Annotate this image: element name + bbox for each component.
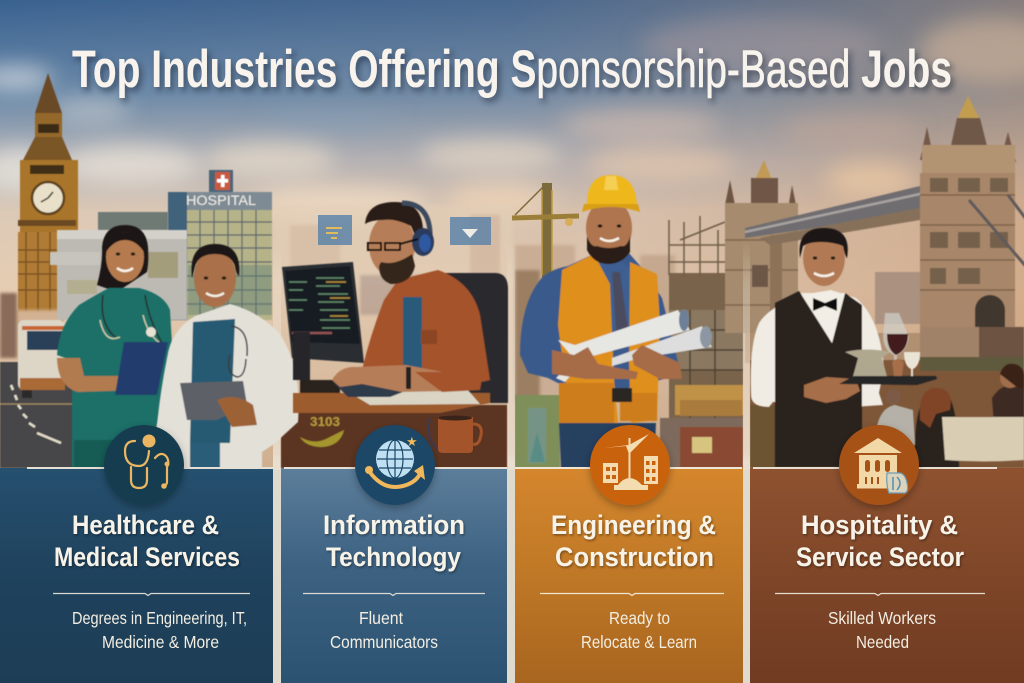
description: Ready to — [609, 608, 670, 628]
bridge base and ground — [745, 327, 1024, 468]
forearms and hands — [552, 347, 638, 379]
right bridge tower — [920, 96, 1016, 328]
IT desk area — [281, 405, 507, 468]
hospital building — [168, 170, 272, 320]
description — [330, 608, 438, 652]
icon: hotel building with mug — [839, 425, 919, 505]
clipboard — [115, 342, 168, 395]
description: Needed — [856, 632, 909, 652]
heading — [54, 510, 240, 572]
icon: globe with arrow: ★ — [406, 434, 418, 449]
landmark: Big Ben clock tower — [18, 73, 78, 322]
keyboard — [333, 382, 408, 397]
description: Skilled Workers — [828, 608, 936, 628]
ambulance — [18, 320, 65, 398]
heading: Healthcare & — [72, 510, 219, 540]
desk code label: 3103 — [310, 414, 340, 429]
street, road and ambulance — [0, 320, 160, 468]
panel: information technology — [281, 425, 507, 683]
bow tie — [813, 298, 837, 311]
floating UI card: download arrow — [450, 217, 491, 245]
heading: Engineering & — [551, 510, 716, 540]
person: doctor — [155, 244, 299, 468]
coffee mug — [438, 416, 481, 453]
icon: headphones — [402, 203, 434, 256]
landmark: Tower Bridge — [725, 96, 1024, 468]
title: Top Industries Offering Sponsorship-Based Jobs — [72, 40, 952, 99]
description: Medicine & More — [102, 632, 219, 652]
heading: Service Sector — [796, 542, 964, 572]
description: Relocate & Learn — [581, 632, 697, 652]
person: IT professional at computer — [282, 202, 508, 413]
distant hazy city — [0, 205, 675, 400]
vest — [558, 254, 660, 423]
heading: Medical Services — [54, 542, 240, 572]
heading: Construction — [555, 542, 714, 572]
person: waiter — [751, 228, 937, 467]
description: Communicators — [330, 632, 438, 652]
panel: healthcare — [0, 425, 273, 683]
icon: globe with arrow — [355, 425, 435, 505]
heading — [323, 510, 465, 572]
panel: hospitality and service — [750, 425, 1024, 683]
heading: Information — [323, 510, 465, 540]
high-level walkway — [745, 186, 920, 238]
arms and hands — [332, 365, 448, 392]
panel: engineering and construction — [515, 425, 743, 683]
rolled blueprints — [556, 309, 712, 382]
description: Degrees in Engineering, IT, — [72, 608, 247, 628]
blue shirt — [520, 252, 682, 388]
distant block — [875, 272, 920, 324]
description — [581, 608, 697, 652]
construction backdrop — [515, 216, 743, 468]
heading — [551, 510, 716, 572]
description — [72, 608, 247, 652]
icon: clock face — [32, 182, 64, 214]
low office building — [50, 212, 187, 320]
desk top — [293, 393, 490, 413]
computer monitor — [282, 262, 364, 402]
heading: Technology — [326, 542, 461, 572]
description: Fluent — [359, 608, 403, 628]
heading: Hospitality & — [801, 510, 958, 540]
icon: stethoscope — [104, 425, 184, 505]
icon: crane and buildings — [590, 425, 670, 505]
serving tray and glasses — [839, 313, 937, 385]
person: nurse — [57, 225, 172, 468]
diners at restaurant table — [875, 364, 1024, 468]
heading — [796, 510, 964, 572]
person: construction engineer — [520, 175, 712, 468]
tablet — [180, 381, 247, 420]
left bridge tower — [725, 160, 798, 333]
hard hat — [582, 175, 640, 212]
floating UI card: document — [318, 215, 352, 245]
construction crane — [512, 183, 579, 278]
background scene: sky and clouds — [0, 0, 1024, 470]
office chair — [445, 273, 508, 403]
description — [828, 608, 936, 652]
hospital sign: HOSPITAL — [186, 193, 257, 208]
panel dividers between scenes — [273, 240, 750, 683]
